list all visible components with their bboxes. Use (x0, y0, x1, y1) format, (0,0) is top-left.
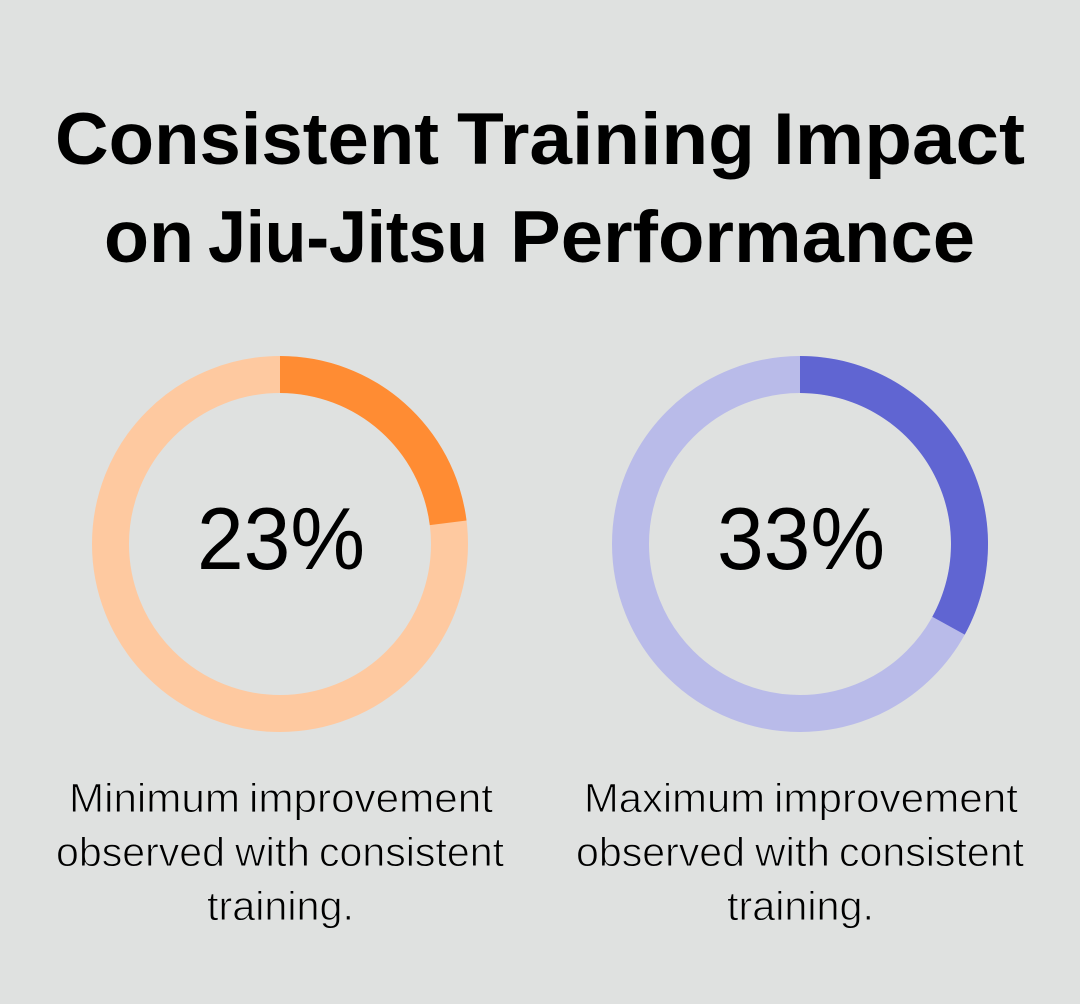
caption: minimum improvement: Minimum (69, 775, 240, 821)
panel: minimum improvement (56, 356, 505, 929)
caption: maximum improvement (576, 775, 1025, 929)
title: Consistent (55, 99, 439, 180)
title: on (104, 197, 194, 278)
title: Jiu-Jitsu (208, 197, 488, 278)
donut chart: 33% (630, 356, 988, 714)
panel: maximum improvement (576, 356, 1025, 929)
caption: maximum improvement: Maximum (584, 775, 765, 821)
caption: maximum improvement: improvement (774, 775, 1019, 821)
caption: maximum improvement: observed (576, 829, 745, 875)
value: 33%: 33% (717, 489, 885, 588)
caption: minimum improvement: observed (56, 829, 225, 875)
caption: minimum improvement (56, 775, 505, 929)
caption: maximum improvement: consistent (839, 829, 1025, 875)
caption: maximum improvement: with (754, 829, 830, 875)
caption: minimum improvement: with (234, 829, 310, 875)
title: Impact (773, 99, 1025, 180)
caption: maximum improvement: training. (727, 883, 874, 929)
donut chart: 23% (110, 356, 467, 714)
title: Training (457, 99, 755, 180)
title (55, 99, 1025, 278)
caption: minimum improvement: consistent (319, 829, 505, 875)
caption: minimum improvement: improvement (249, 775, 494, 821)
title: Performance (510, 197, 975, 278)
caption: minimum improvement: training. (207, 883, 354, 929)
value: 23%: 23% (197, 489, 365, 588)
